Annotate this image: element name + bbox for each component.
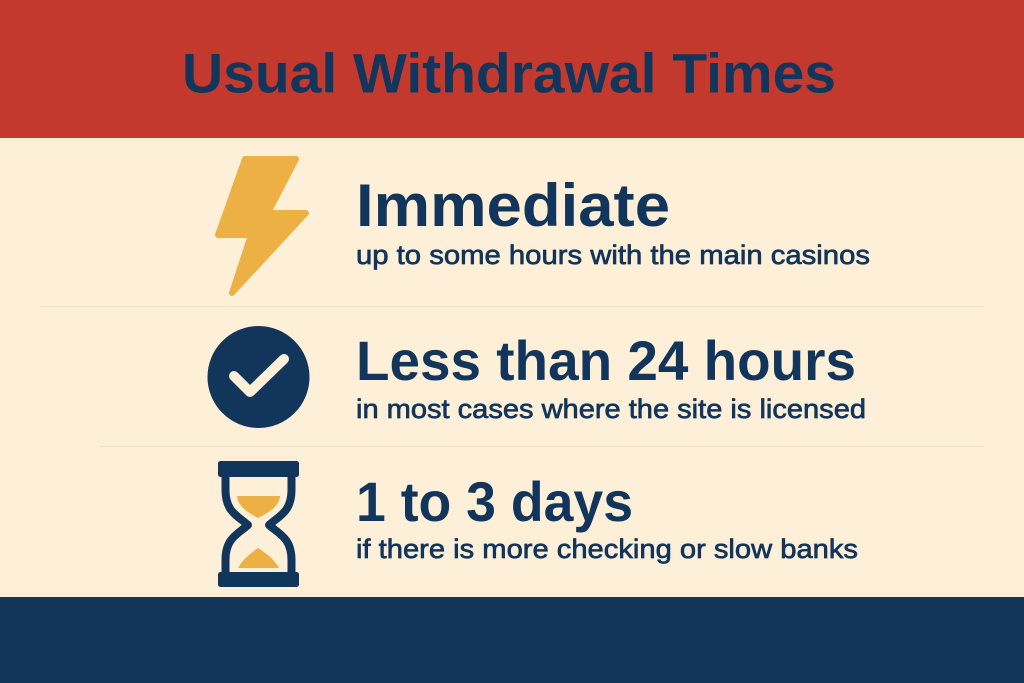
- row: less than 24 hours: [208, 326, 866, 428]
- footer band: [0, 597, 1024, 683]
- heading: less than 24 hours: Less than 24 hours: [356, 329, 856, 392]
- title: Usual Withdrawal Times: [182, 42, 836, 104]
- heading: 1 to 3 days: 1 to 3 days: [356, 470, 633, 533]
- row: immediate: [218, 159, 870, 293]
- row: 1 to 3 days: [218, 461, 858, 587]
- text: 1 to 3 days detail: if there is more checking or slow banks: [356, 534, 858, 564]
- icon: check circle: [208, 326, 310, 428]
- heading: immediate: Immediate: [356, 172, 670, 239]
- text: immediate detail: up to some hours with the main casinos: [356, 240, 870, 270]
- text: less than 24 hours detail: in most cases where the site is licensed: [356, 394, 866, 424]
- icon: lightning bolt: [218, 159, 306, 293]
- icon: hourglass: [218, 461, 299, 587]
- header band: [0, 0, 1024, 138]
